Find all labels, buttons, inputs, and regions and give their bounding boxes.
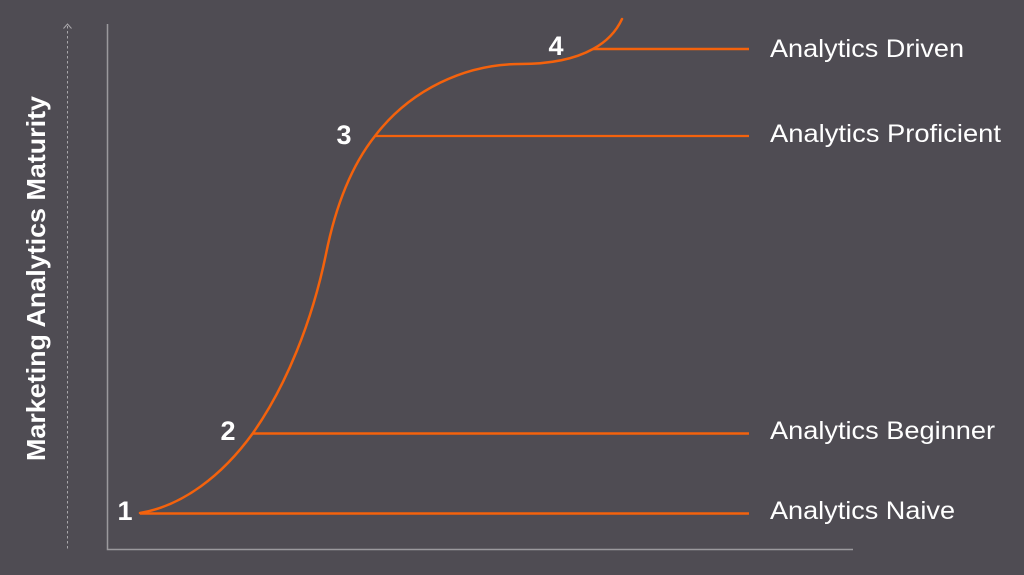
y-axis title: Marketing Analytics Maturity <box>21 95 51 461</box>
label: analytics proficient: Analytics Proficient <box>770 120 1001 148</box>
level line: analytics proficient <box>375 135 749 137</box>
stage number 3: 3 <box>336 120 352 150</box>
stage number 1: 1 <box>117 496 133 526</box>
label: analytics naive: Analytics Naive <box>770 497 955 525</box>
maturity curve <box>140 19 622 513</box>
label: analytics driven: Analytics Driven <box>770 35 964 63</box>
label: analytics beginner: Analytics Beginner <box>770 417 995 445</box>
chart axes <box>108 24 853 550</box>
stage number 2: 2 <box>220 416 236 446</box>
level line: analytics driven <box>593 48 749 50</box>
level line: analytics beginner <box>253 432 749 435</box>
level line: analytics naive <box>140 512 749 515</box>
y-axis arrow: dotted maturity direction <box>64 24 72 549</box>
stage number 4: 4 <box>548 31 564 61</box>
